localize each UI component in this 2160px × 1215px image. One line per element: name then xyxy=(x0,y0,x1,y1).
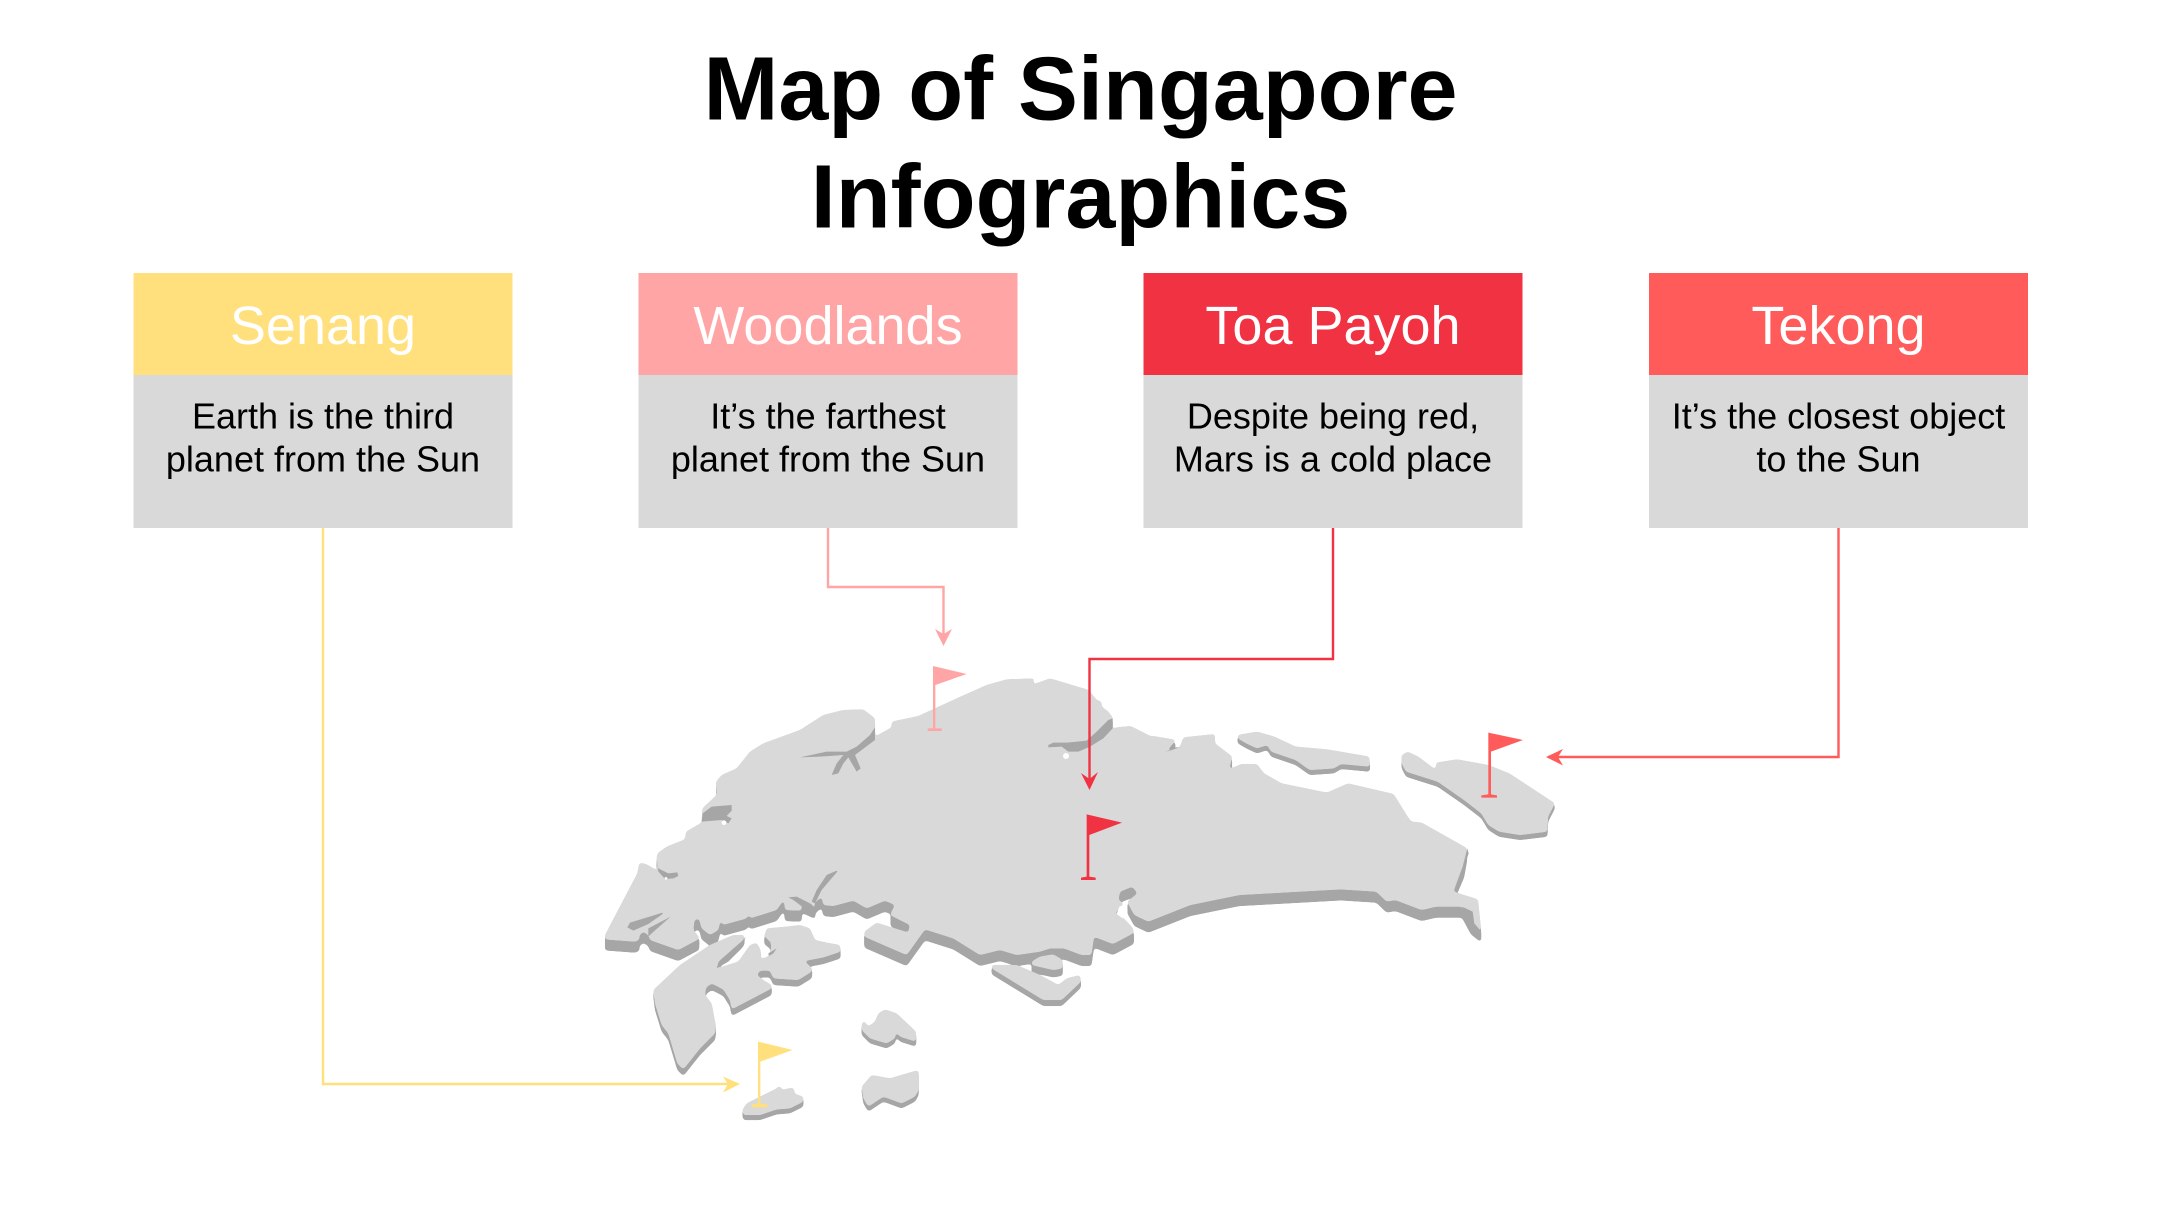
flag: Toa Payoh xyxy=(1081,814,1122,880)
panel: Toa Payoh: Toa Payoh xyxy=(1205,296,1461,356)
inland waterways xyxy=(627,718,1481,968)
map of Singapore xyxy=(605,666,1555,1120)
title xyxy=(703,40,1458,248)
title: Map of Singapore xyxy=(703,40,1458,140)
arrow: Toa Payoh xyxy=(1081,528,1333,790)
arrow: Senang xyxy=(323,528,740,1092)
panel: Toa Payoh xyxy=(1144,273,1522,528)
flag: Senang xyxy=(752,1042,793,1107)
panel: Senang: Senang xyxy=(230,296,416,356)
flag: Woodlands xyxy=(928,666,967,731)
panel: Senang xyxy=(134,273,512,528)
panel: Woodlands: Woodlands xyxy=(693,296,963,356)
panel: Senang: planet from the Sun xyxy=(166,438,480,480)
arrow: Woodlands xyxy=(828,528,952,646)
panel: Tekong xyxy=(1649,273,2028,528)
flag: Tekong xyxy=(1481,733,1523,798)
panel: Tekong: It’s the closest object xyxy=(1672,396,2005,436)
panel: Toa Payoh: Mars is a cold place xyxy=(1174,438,1492,480)
water gaps xyxy=(665,753,1127,918)
land surface xyxy=(605,678,1555,1115)
panel: Tekong: to the Sun xyxy=(1756,438,1921,480)
panel: Woodlands: planet from the Sun xyxy=(671,438,985,480)
panel: Woodlands: It’s the farthest xyxy=(710,396,946,436)
panel: Tekong: Tekong xyxy=(1751,296,1926,356)
panel: Woodlands xyxy=(638,273,1018,528)
panel: Toa Payoh: Despite being red, xyxy=(1187,396,1479,436)
arrow: Tekong xyxy=(1546,528,1838,766)
land extrusion xyxy=(605,681,1555,1120)
title: Infographics xyxy=(811,148,1350,248)
panel: Senang: Earth is the third xyxy=(192,396,454,436)
